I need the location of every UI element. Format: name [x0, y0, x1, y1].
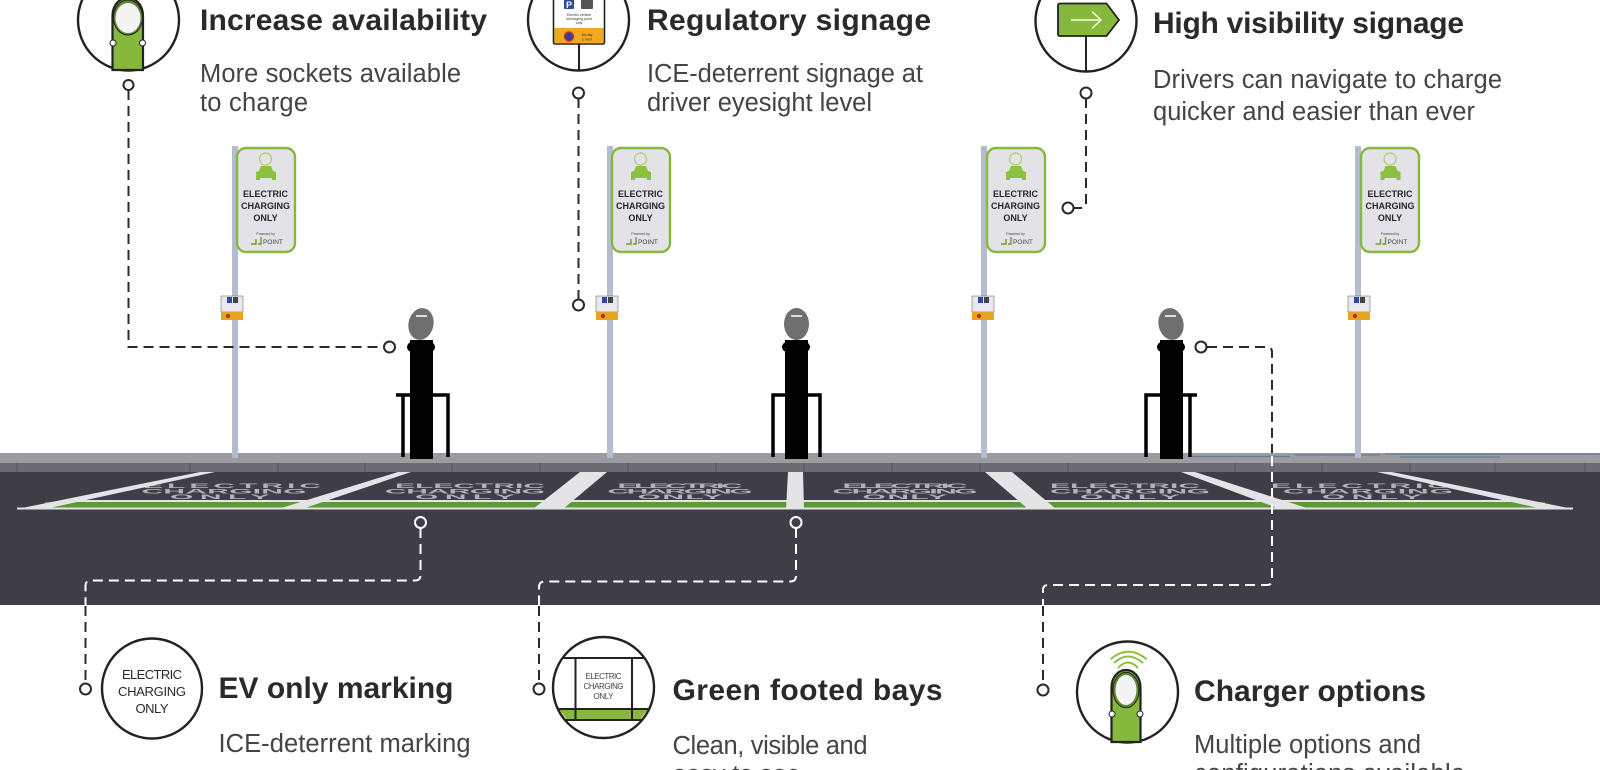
sign post 4: POINT	[1388, 239, 1407, 246]
bay marking text	[142, 482, 1453, 501]
icon: bay: ELECTRIC	[586, 672, 622, 681]
bay marking text: ELECTRIC	[1050, 482, 1201, 489]
connector: high visibility signage	[1062, 88, 1092, 214]
connector: green footed bays	[534, 517, 802, 694]
bay marking text: ONLY	[415, 494, 516, 501]
bay dividers	[17, 472, 1573, 509]
heading: EV only marking	[218, 672, 454, 705]
description: Clean, visible and	[672, 732, 868, 760]
description: to charge	[200, 89, 308, 117]
description: More sockets available	[200, 60, 461, 88]
bay marking text: ONLY	[1322, 494, 1423, 501]
bay marking text: CHARGING	[1283, 488, 1453, 495]
sign post 1: ONLY	[253, 213, 278, 223]
bay marking text: CHARGING	[385, 488, 545, 495]
sign post 4: ONLY	[1378, 213, 1402, 223]
sign post 4: ELECTRIC	[1368, 189, 1413, 199]
icon: regulatory sign	[528, 0, 629, 71]
sign post 1: POINT	[263, 239, 283, 246]
icon: regulatory sign: recharging point	[566, 17, 592, 21]
feature: charger options	[1077, 642, 1465, 770]
sign post 3: Powered by	[1006, 232, 1025, 236]
heading: Charger options	[1194, 675, 1426, 708]
heading: Green footed bays	[672, 674, 942, 707]
feature: regulatory signage	[528, 0, 931, 117]
bay marking text: ELECTRIC	[842, 482, 968, 489]
charger 3	[1146, 306, 1197, 459]
bay marking text: ELECTRIC	[618, 482, 743, 489]
icon: bay	[553, 637, 654, 738]
sign post 3	[972, 146, 1045, 458]
description: ICE-deterrent signage at	[647, 60, 923, 88]
heading: Regulatory signage	[647, 4, 931, 37]
sign post 2: Powered by	[631, 232, 650, 236]
description: quicker and easier than ever	[1153, 98, 1476, 126]
sign post 4: CHARGING	[1366, 201, 1414, 211]
feature: increase availability	[78, 0, 487, 117]
heading: Increase availability	[200, 4, 487, 37]
green foot strip	[17, 500, 1573, 510]
connector: EV only marking	[80, 517, 426, 694]
icon: road marking	[102, 638, 202, 738]
icon: road marking: ELECTRIC	[122, 667, 182, 682]
sign post 1	[221, 146, 295, 458]
sign post 3: ONLY	[1003, 213, 1028, 223]
charger 2	[773, 308, 820, 459]
bay marking text: ELECTRIC	[143, 482, 322, 489]
bay marking text: CHARGING	[832, 488, 978, 495]
description: Drivers can navigate to charge	[1153, 66, 1502, 94]
sign post 2: ONLY	[628, 213, 653, 223]
icon: regulatory sign: Electric vehicle	[567, 13, 591, 17]
bay marking text: ELECTRIC	[395, 482, 546, 489]
sign post 1: CHARGING	[241, 201, 290, 211]
icon: bay: ONLY	[594, 692, 614, 701]
sign post 3: POINT	[1013, 239, 1033, 246]
description: driver eyesight level	[647, 89, 872, 117]
sign post 2: CHARGING	[616, 201, 665, 211]
charger 1	[396, 306, 448, 459]
sign post 2: POINT	[638, 239, 658, 246]
feature: EV only marking	[102, 638, 470, 758]
tarmac	[0, 472, 1600, 605]
bay marking text: ONLY	[1080, 494, 1181, 501]
icon: charger	[78, 0, 179, 70]
sign post 2: ELECTRIC	[618, 189, 664, 199]
icon: wireless charger	[1077, 642, 1178, 742]
connector: regulatory signage	[573, 88, 584, 310]
bay marking text: CHARGING	[608, 488, 752, 495]
sign post 4	[1348, 146, 1419, 458]
icon: road marking: CHARGING	[118, 684, 186, 699]
icon: regulatory sign: only	[576, 21, 582, 25]
sign post 1: ELECTRIC	[243, 189, 289, 199]
icon: regulatory sign: 1 hour	[582, 38, 593, 42]
connector: charger options	[1038, 342, 1272, 696]
sign post 2	[596, 146, 670, 458]
icon: direction sign	[1036, 0, 1136, 72]
bay marking text: CHARGING	[1050, 488, 1210, 495]
icon: bay: CHARGING	[584, 682, 624, 691]
bay marking text: CHARGING	[141, 488, 307, 495]
description: ICE-deterrent marking	[218, 730, 470, 758]
heading: High visibility signage	[1153, 7, 1464, 40]
kerb	[0, 463, 1600, 472]
bay marking text: ONLY	[170, 494, 271, 501]
feature: green footed bays	[553, 637, 942, 770]
feature: high visibility signage	[1036, 0, 1502, 126]
bay marking text: ELECTRIC	[1271, 482, 1450, 489]
bay marking text: ONLY	[638, 494, 723, 501]
sign post 3: ELECTRIC	[993, 189, 1039, 199]
icon: regulatory sign: All day	[582, 33, 593, 37]
pavement	[0, 453, 1600, 463]
icon: road marking: ONLY	[136, 701, 169, 716]
description: Multiple options and	[1194, 731, 1421, 759]
sign post 4: Powered by	[1381, 232, 1399, 236]
sign post 3: CHARGING	[991, 201, 1040, 211]
road scene	[0, 453, 1600, 605]
connector: increase availability	[124, 80, 395, 352]
icon: regulatory sign: P	[566, 0, 572, 10]
bay marking text: ONLY	[862, 494, 948, 501]
sign post 1: Powered by	[256, 232, 275, 236]
